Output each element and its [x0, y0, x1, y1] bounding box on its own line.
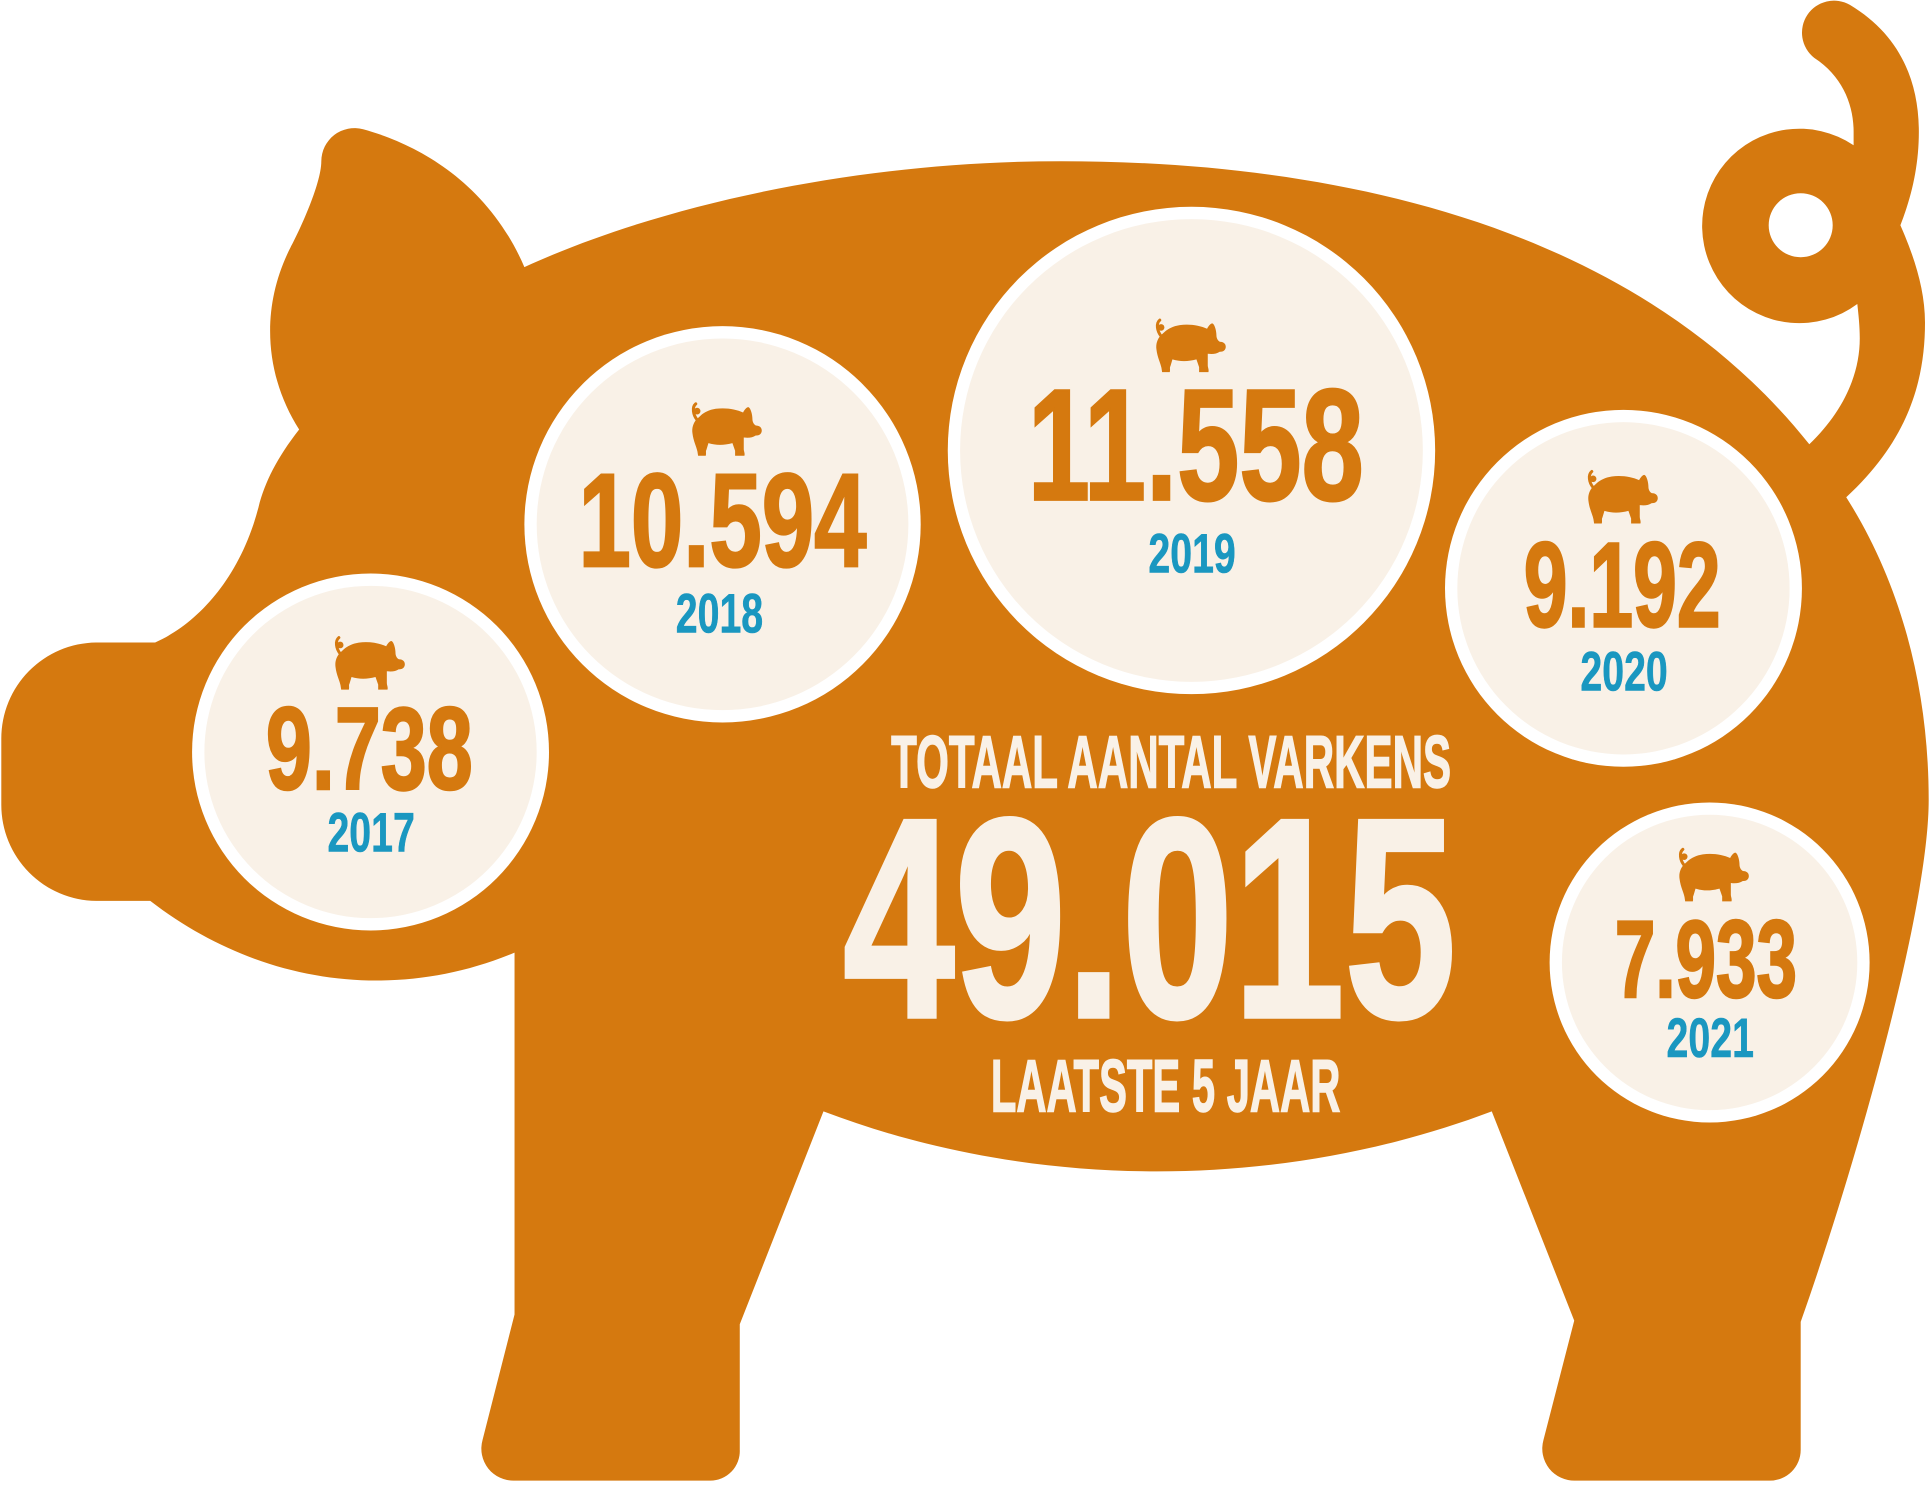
- year 2020: 2020: [1580, 640, 1668, 702]
- value 2020: 9.192: [1524, 517, 1721, 652]
- total number: 49.015: [843, 761, 1456, 1078]
- circle 2020: [1445, 410, 1802, 767]
- year 2017: 2017: [327, 802, 415, 864]
- year 2021: 2021: [1667, 1007, 1754, 1069]
- subheading: laatste 5 jaar: LAATSTE 5 JAAR: [991, 1044, 1340, 1127]
- value 2018: 10.594: [579, 447, 867, 595]
- icon: pig 2020: [1588, 471, 1658, 523]
- icon: pig 2019: [1156, 320, 1226, 372]
- circle 2021: [1550, 802, 1870, 1122]
- circle 2019: [948, 207, 1435, 694]
- year 2019: 2019: [1148, 522, 1236, 584]
- value 2021: 7.933: [1615, 899, 1797, 1021]
- icon: pig 2021: [1679, 849, 1749, 901]
- circle 2017: [192, 574, 549, 930]
- year 2018: 2018: [676, 583, 763, 645]
- circle 2018: [524, 326, 921, 722]
- value 2017: 9.738: [266, 683, 473, 814]
- icon: pig 2017: [335, 638, 405, 690]
- value 2019: 11.558: [1028, 356, 1364, 534]
- icon: pig 2018: [692, 404, 762, 456]
- heading: totaal aantal varkens: TOTAAL AANTAL VARKENS: [891, 721, 1451, 804]
